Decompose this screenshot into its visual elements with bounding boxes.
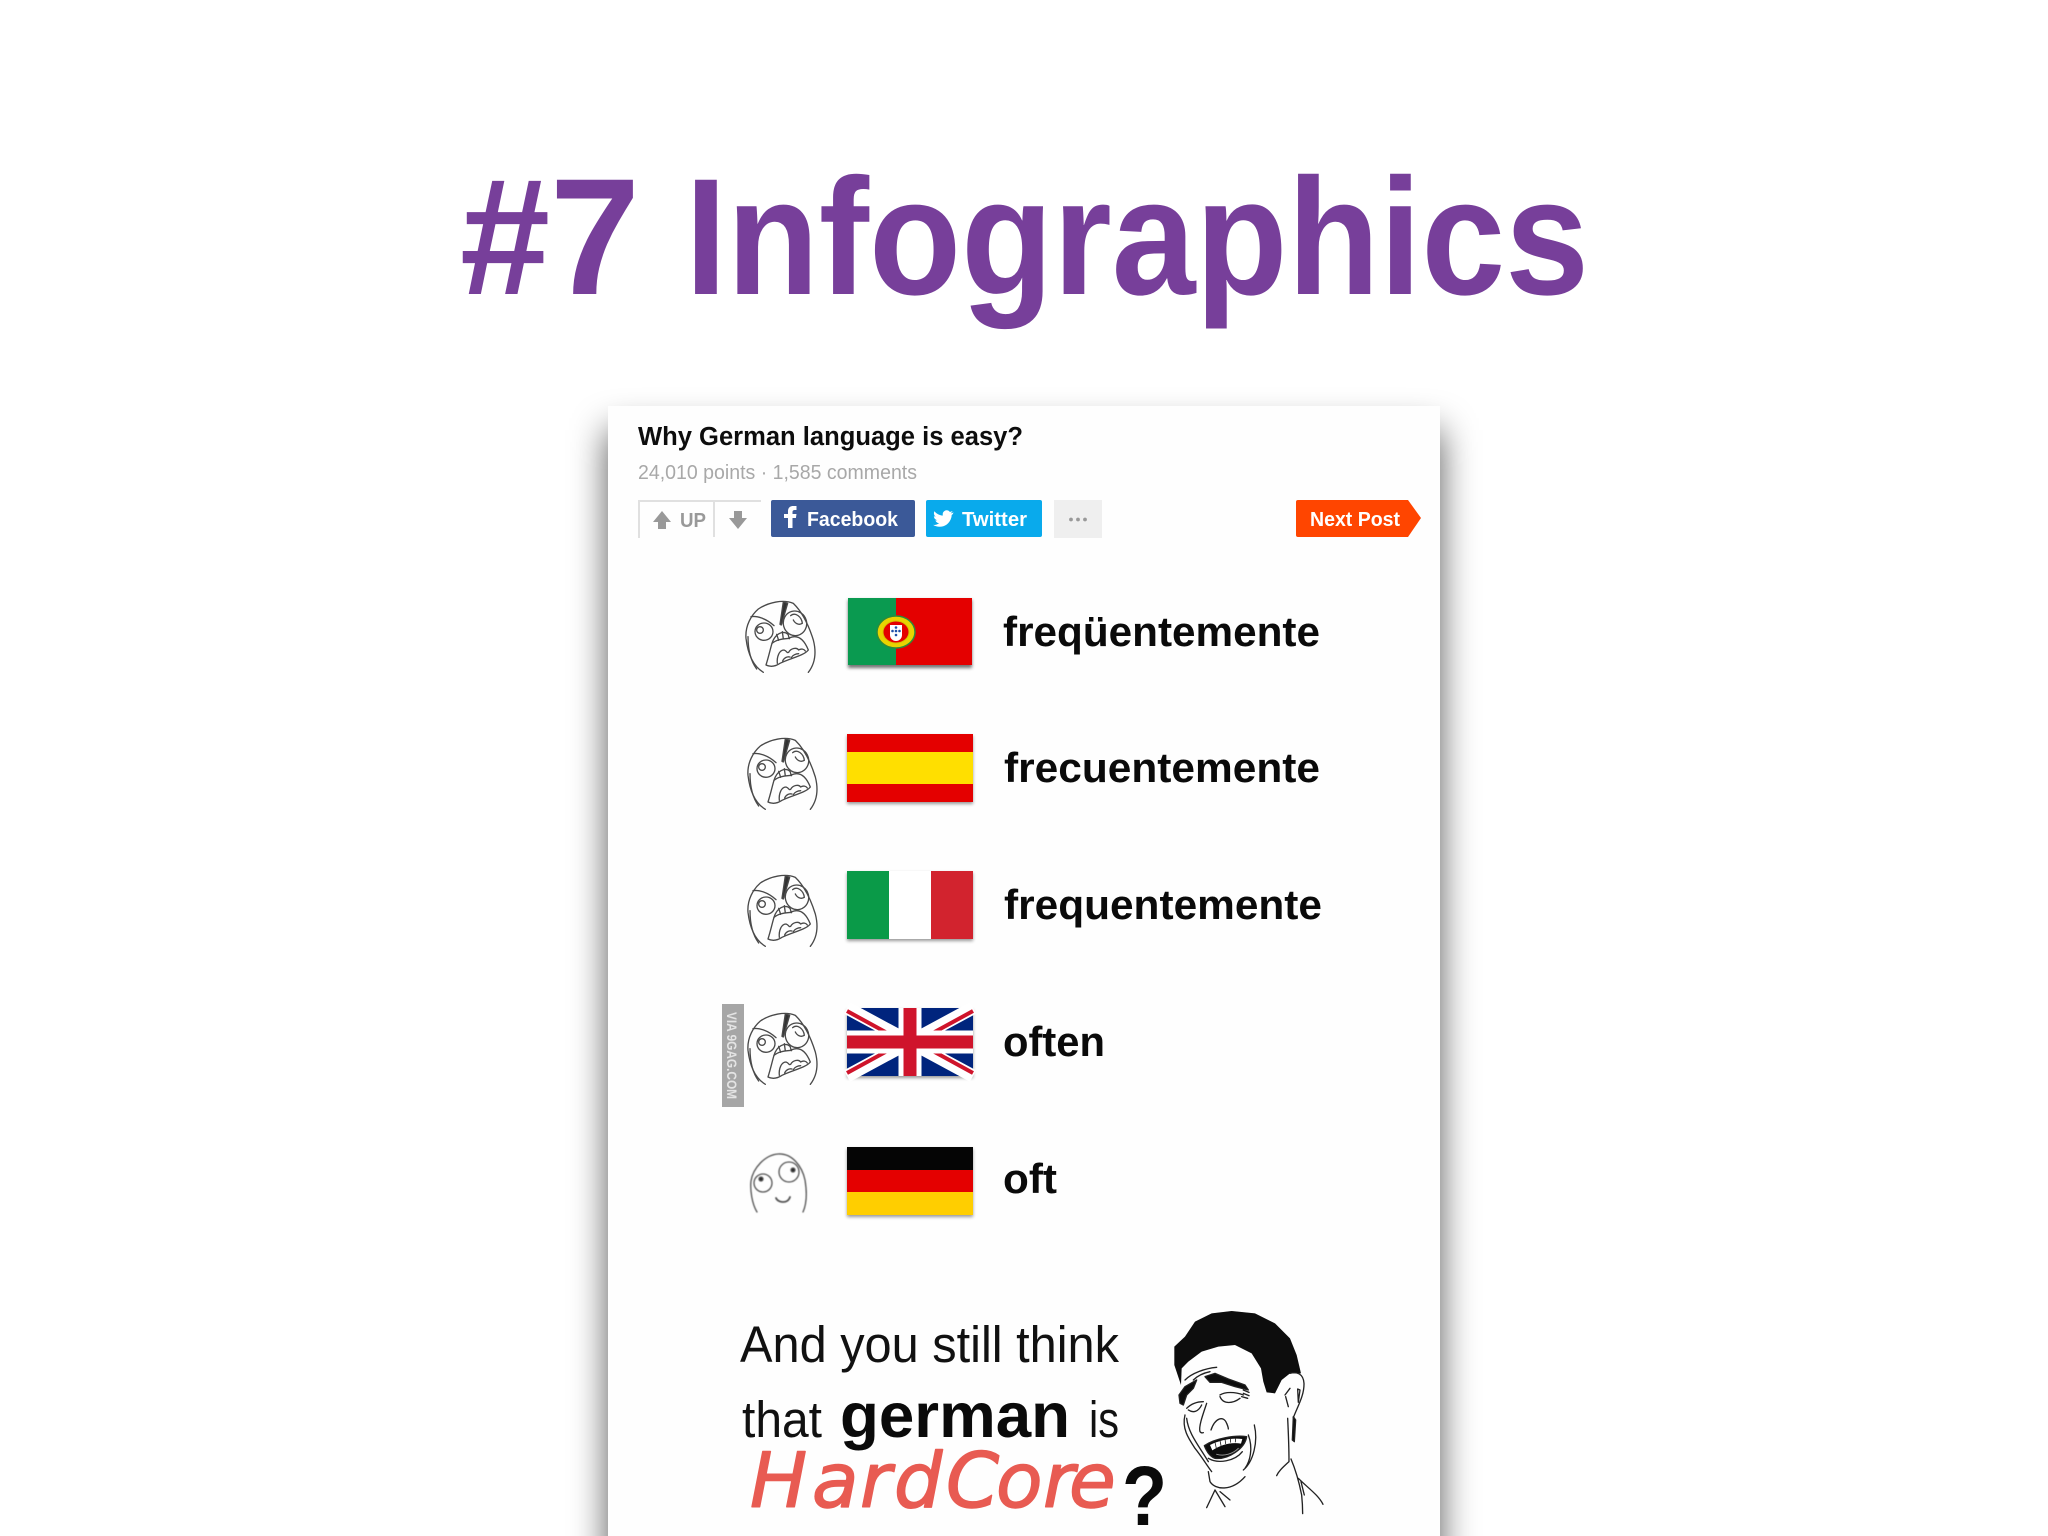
row: Spain	[748, 734, 1320, 809]
word: Portuguese: freqüentemente	[1003, 608, 1320, 655]
punchline text: german	[840, 1381, 1070, 1451]
icon: twitter bird	[933, 510, 954, 527]
vote buttons: UP	[680, 510, 706, 532]
next post button: Next Post	[1310, 509, 1400, 531]
word: German: oft	[1003, 1155, 1057, 1202]
punchline text: is	[1089, 1391, 1119, 1448]
flag: United Kingdom	[847, 1008, 973, 1078]
punchline text: that	[742, 1391, 822, 1448]
icon: rage face	[746, 601, 815, 672]
icon: rage face	[748, 875, 817, 946]
icon: up arrow	[653, 511, 671, 529]
watermark: via 9gag: VIA 9GAG.COM	[724, 1012, 740, 1099]
icon: rage face	[748, 1013, 817, 1084]
flag: Italy	[847, 871, 973, 941]
icon: down arrow	[729, 511, 747, 529]
word: Italian: frequentemente	[1004, 881, 1322, 928]
icon: relaxed face	[751, 1154, 806, 1212]
watermark: via 9gag	[722, 1004, 744, 1107]
more options button	[1054, 500, 1102, 538]
twitter button	[926, 500, 1042, 537]
flag: Germany	[847, 1147, 973, 1217]
flag: Portugal	[848, 598, 972, 668]
icon: rage face	[748, 738, 817, 809]
row: Portugal	[746, 598, 1320, 672]
panel: 9GAG post card	[608, 406, 1440, 1536]
post heading: Why German language is easy?	[638, 423, 1023, 451]
row: Italy	[748, 871, 1322, 946]
title: #7	[460, 145, 640, 330]
flag: Spain	[847, 734, 973, 804]
punchline text: HardCore	[750, 1436, 1116, 1525]
facebook button: Facebook	[807, 509, 899, 531]
facebook button	[771, 500, 915, 537]
vote buttons	[639, 501, 761, 538]
post stats: 24,010 points · 1,585 comments	[638, 462, 917, 484]
punchline text	[740, 1316, 1167, 1536]
icon: laughing face	[1174, 1311, 1323, 1514]
word: Spanish: frecuentemente	[1004, 744, 1320, 791]
twitter button: Twitter	[962, 509, 1027, 531]
next post button	[1296, 500, 1421, 537]
word: English: often	[1003, 1018, 1105, 1065]
row: Germany	[751, 1147, 1057, 1217]
row: United Kingdom	[722, 1004, 1105, 1107]
icon: facebook f	[784, 506, 796, 528]
title: Infographics	[685, 145, 1589, 330]
punchline text: And you still think	[740, 1316, 1119, 1373]
